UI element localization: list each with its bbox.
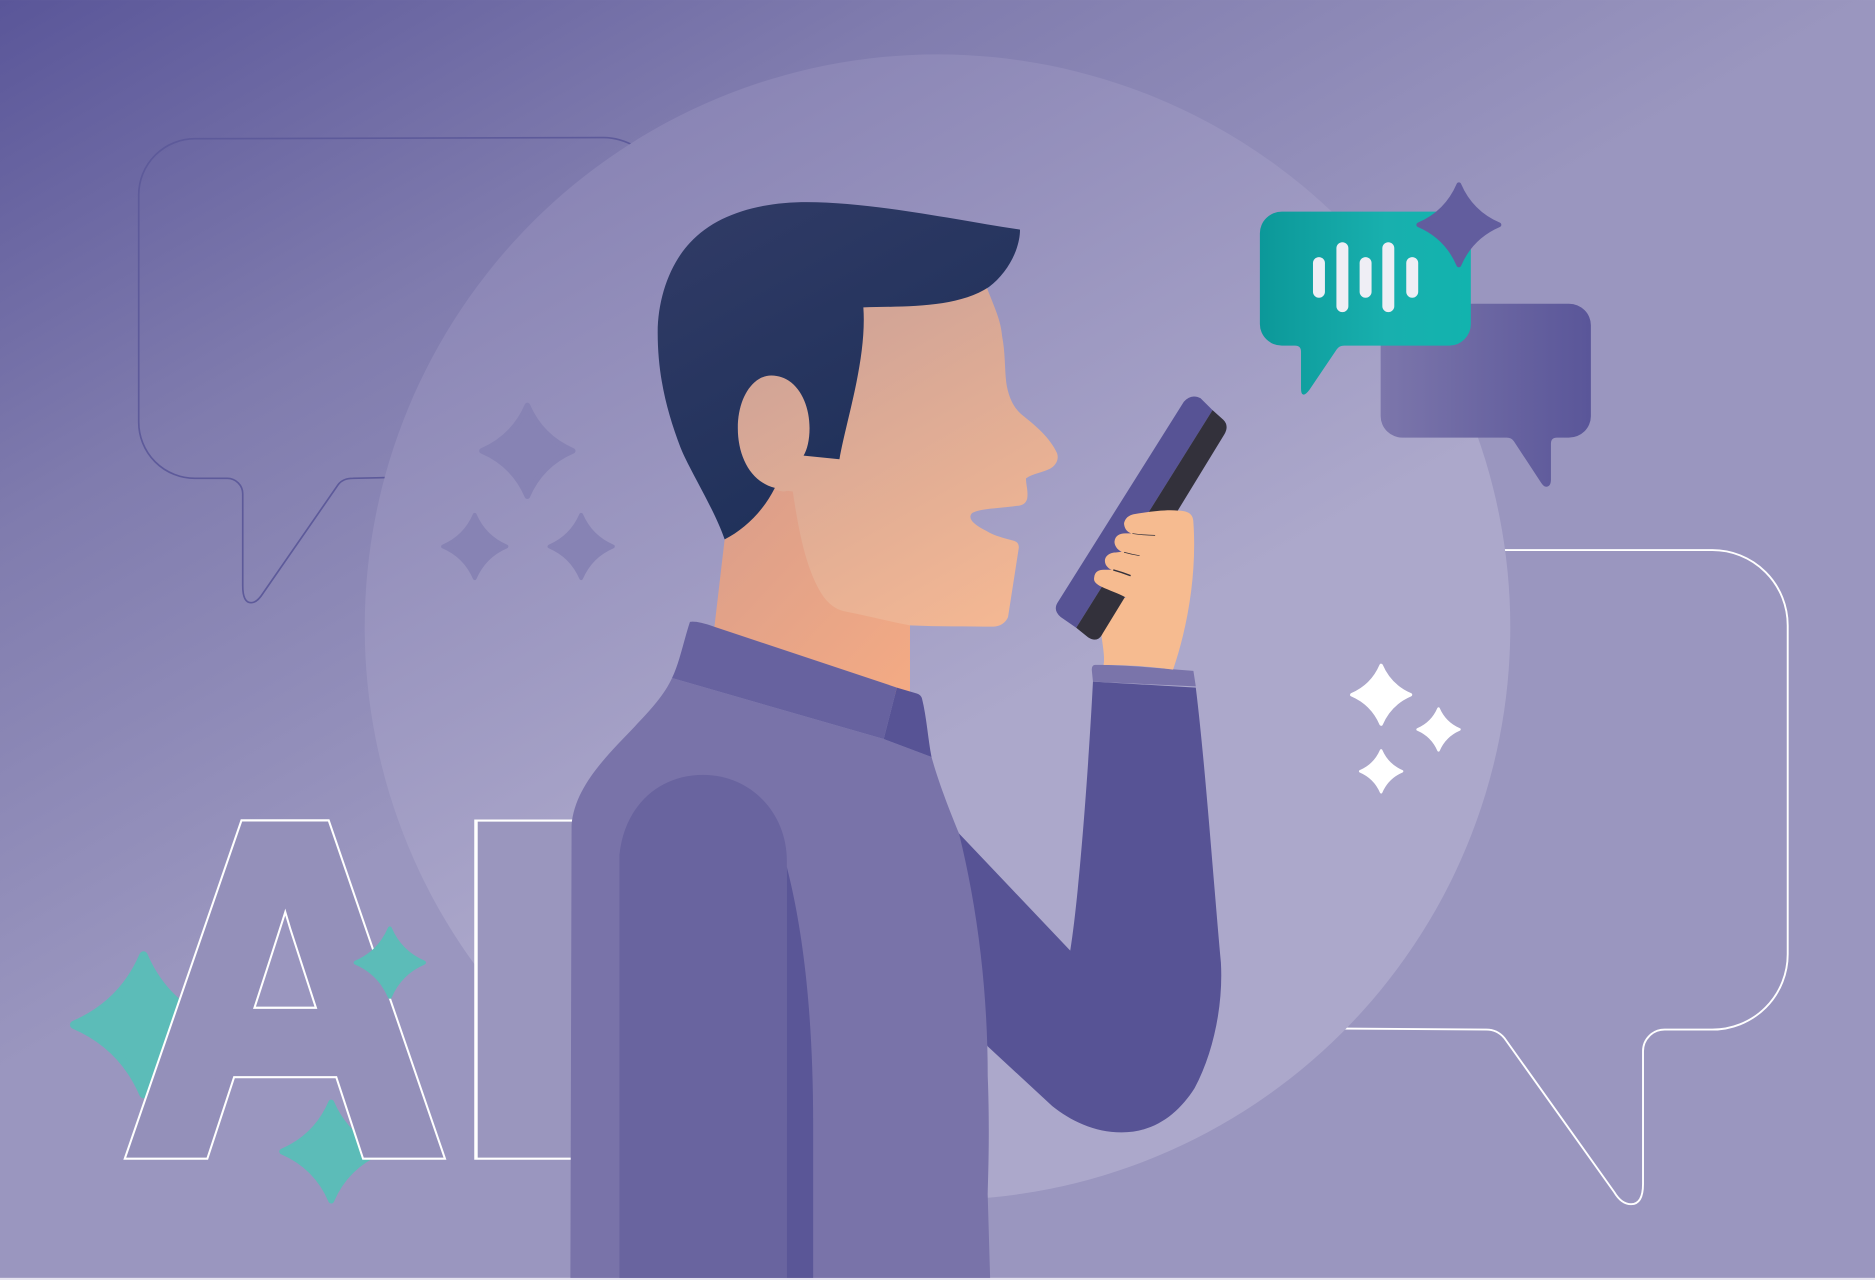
collar shadow	[884, 688, 932, 757]
neck	[714, 488, 910, 700]
finger creases	[1113, 534, 1155, 576]
large background circle	[365, 54, 1510, 1200]
hand	[1094, 510, 1194, 670]
near arm shadow	[787, 867, 813, 1278]
sparkle: teal bottom	[282, 1103, 380, 1201]
speech bubble: purple	[1381, 304, 1591, 487]
outline speech bubble: left	[139, 138, 646, 603]
face	[765, 287, 1058, 627]
sparkle: teal large	[74, 955, 213, 1094]
letter I outline: I	[423, 715, 642, 1264]
ear	[738, 373, 811, 491]
sparkles: purple group	[443, 405, 613, 578]
speech bubble: teal	[1260, 212, 1471, 395]
icon: sound wave bars	[1313, 242, 1418, 312]
far arm	[933, 682, 1221, 1132]
letter A outline: A	[127, 730, 444, 1248]
sparkle: on teal bubble	[1419, 185, 1499, 265]
wrist behind phone	[1101, 598, 1154, 665]
collar	[672, 622, 897, 739]
outline speech bubble: right	[1315, 550, 1788, 1204]
sparkle: teal on letter A	[356, 929, 424, 997]
letter A outline: A	[127, 730, 444, 1248]
phone	[1056, 396, 1227, 640]
sparkles: white group	[1352, 665, 1459, 792]
hair	[658, 202, 1020, 539]
jacket body	[570, 678, 990, 1278]
jacket cuff	[1092, 665, 1196, 686]
person speaking into phone	[570, 202, 1227, 1278]
near arm	[619, 775, 787, 1278]
